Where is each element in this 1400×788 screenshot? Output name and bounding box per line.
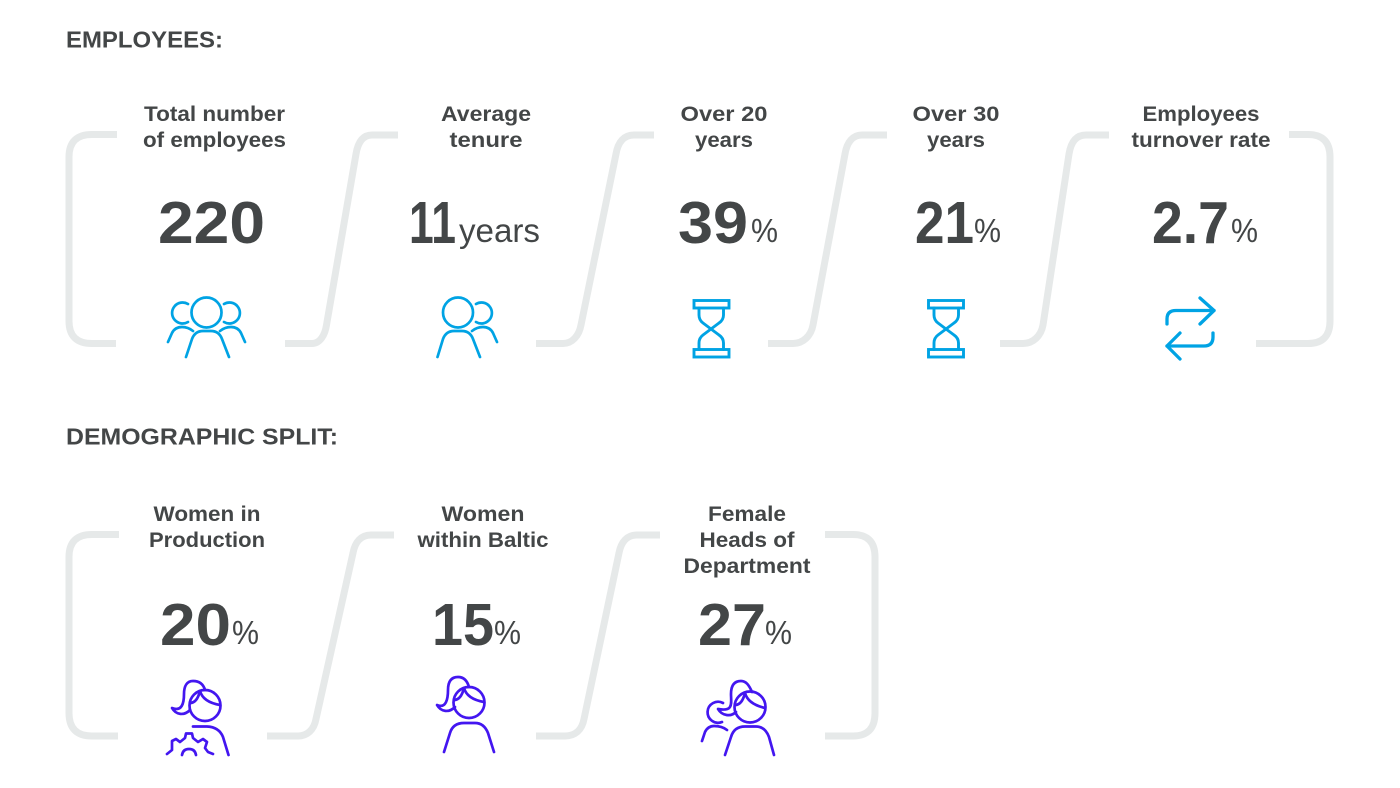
stat: women within baltic: % <box>494 614 521 651</box>
stat: employees turnover rate: 2.7 <box>1152 190 1229 256</box>
icon: woman <box>437 677 494 752</box>
stat: women within baltic: 15 <box>432 592 494 658</box>
stat: employees turnover rate: % <box>1231 212 1258 249</box>
stat: employees turnover rate: turnover rate <box>1132 128 1271 152</box>
stat: female heads of department <box>684 502 810 755</box>
stat: women within baltic: Women <box>442 502 524 526</box>
stat: average tenure <box>409 102 540 357</box>
panel: demographic bracket frame <box>69 534 875 736</box>
stat: average tenure: years <box>459 212 540 249</box>
stat: female heads of department: % <box>765 614 792 651</box>
stat: over 20 years: years <box>695 128 753 152</box>
stat: average tenure: 11 <box>409 190 456 256</box>
icon: woman with gear <box>167 681 228 755</box>
stat: employees turnover rate: Employees <box>1142 102 1260 126</box>
stat: over 30 years: years <box>927 128 985 152</box>
heading: employees: EMPLOYEES: <box>66 26 223 52</box>
stat: women in production: Production <box>149 528 265 552</box>
stat: female heads of department: 27 <box>698 592 766 658</box>
heading: demographic split: DEMOGRAPHIC SPLIT: <box>66 424 338 450</box>
stat: women within baltic <box>416 502 549 752</box>
stat: over 20 years: % <box>751 212 778 249</box>
stat: women in production <box>149 502 265 755</box>
stat: total number of employees: 220 <box>158 190 265 256</box>
stat: female heads of department: Heads of <box>700 528 795 552</box>
stat: over 20 years <box>678 102 778 357</box>
stat: total number of employees: of employees <box>143 128 286 152</box>
stat: female heads of department: Department <box>684 554 810 578</box>
stat: over 20 years: Over 20 <box>680 102 768 126</box>
stat: total number of employees: Total number <box>144 102 286 126</box>
stat: women in production: 20 <box>160 592 231 658</box>
icon: two people <box>438 298 497 357</box>
panel: employees bracket frame <box>69 134 1330 344</box>
stat: over 20 years: 39 <box>678 190 748 256</box>
stat: over 30 years: % <box>974 212 1001 249</box>
stat: over 30 years: 21 <box>915 190 974 256</box>
icon: hourglass <box>928 300 964 357</box>
icon: woman and child <box>702 681 774 755</box>
stat: women in production: % <box>232 614 259 651</box>
stat: total number of employees <box>143 102 286 357</box>
stat: employees turnover rate <box>1132 102 1271 359</box>
icon: turnover arrows <box>1167 298 1214 359</box>
stat: over 30 years <box>912 102 1001 357</box>
stat: women within baltic: within Baltic <box>416 528 549 552</box>
stat: over 30 years: Over 30 <box>912 102 1000 126</box>
stat: female heads of department: Female <box>708 502 786 526</box>
stat: average tenure: Average <box>441 102 531 126</box>
stat: average tenure: tenure <box>450 128 523 152</box>
icon: three people <box>168 298 245 357</box>
icon: hourglass <box>694 300 729 357</box>
stat: women in production: Women in <box>154 502 260 526</box>
